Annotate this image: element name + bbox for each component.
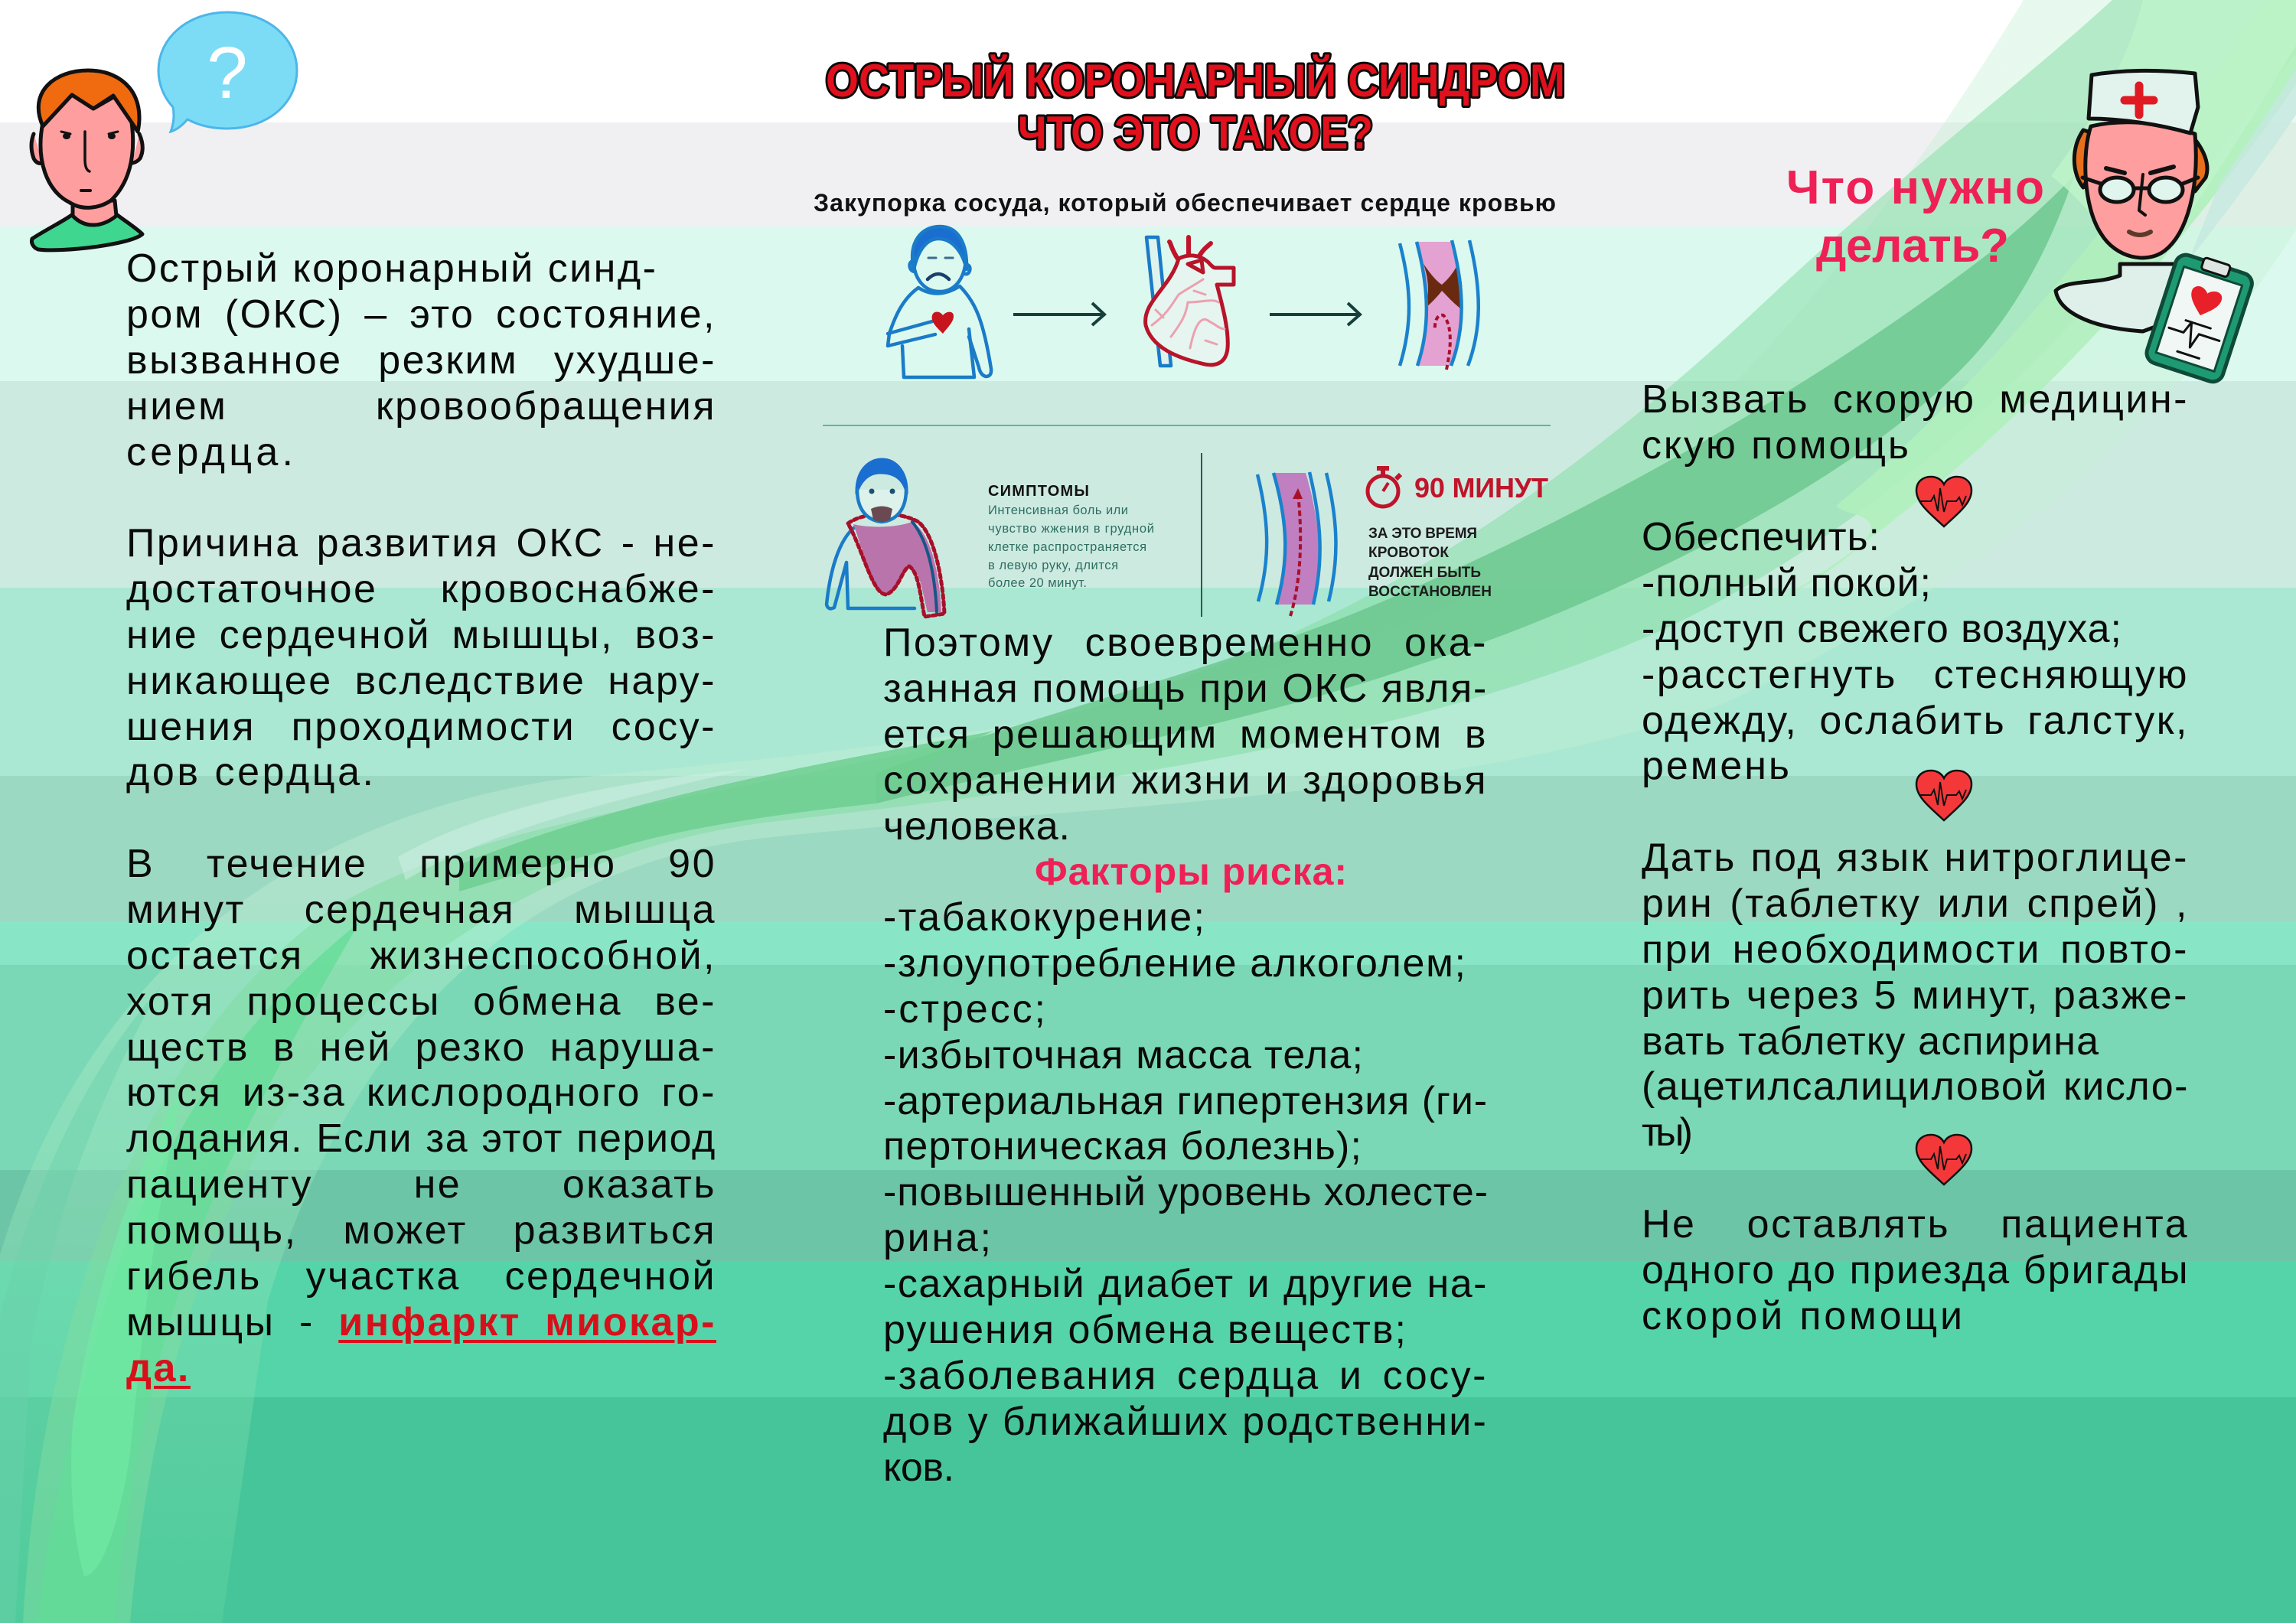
icon: small red heart: [932, 312, 954, 334]
icon: open artery: [1257, 472, 1336, 616]
text block: medication: рин (таблетку или спрей) ,: [1642, 882, 2189, 926]
icon: heart 3: [1916, 1135, 1971, 1185]
clipboard: [2144, 249, 2255, 384]
text block: 90 minutes explanation: остается жизнеспособной,: [126, 934, 716, 978]
doctor's coat: [2056, 264, 2175, 331]
title: ОСТРЫЙ КОРОНАРНЫЙ СИНДРОМ: [826, 55, 1565, 106]
text: 90 minutes: [1368, 472, 1548, 600]
text block: 90 minutes explanation: пациенту не оказать: [126, 1162, 716, 1207]
list: risk factors: -сахарный диабет и другие на-: [883, 1262, 1488, 1306]
text block: provide rest and air: Обеспечить:: [1642, 515, 1880, 559]
text block: 90 minutes explanation: [126, 842, 716, 1390]
divider line: [823, 425, 1551, 426]
list: risk factors: ков.: [883, 1445, 954, 1490]
text block: cause of ACS: [126, 521, 716, 794]
text: symptoms: [988, 483, 1154, 590]
text block: 90 minutes explanation: минут сердечная мышца: [126, 888, 716, 932]
text: 90 minutes: КРОВОТОК: [1368, 545, 1449, 561]
list: risk factors: -заболевания сердца и сосу-: [883, 1354, 1488, 1398]
text block: provide rest and air: -доступ свежего воздуха;: [1642, 607, 2122, 651]
list: risk factors: дов у ближайших родственни-: [883, 1400, 1488, 1444]
list: risk factors: -повышенный уровень холесте-: [883, 1170, 1489, 1214]
icon: man with pain area: [827, 459, 944, 617]
text block: 90 minutes explanation: да.: [126, 1346, 191, 1390]
text block: do not leave patient: скорой помощи: [1642, 1294, 1962, 1338]
list: risk factors: рушения обмена веществ;: [883, 1308, 1406, 1352]
text block: definition of ACS: сердца.: [126, 430, 293, 474]
doctor's hat: [2089, 70, 2198, 133]
text block: provide rest and air: -расстегнуть стесняющую: [1642, 653, 2189, 697]
list: risk factors: -злоупотребление алкоголем;: [883, 941, 1466, 986]
title: ЧТО ЭТО ТАКОЕ?: [1018, 107, 1373, 158]
text block: 90 minutes explanation: мышцы - инфаркт миокар-: [126, 1300, 716, 1344]
subtitle: blockage explanation: Закупорка сосуда, который обеспечивает сердце кровью: [814, 189, 1556, 217]
heading: what to do: делать?: [1816, 220, 2009, 272]
text block: do not leave patient: Не оставлять пациента: [1642, 1202, 2189, 1247]
doctor's face: [2074, 122, 2207, 258]
text: 90 minutes: ЗА ЭТО ВРЕМЯ: [1368, 526, 1477, 542]
text block: call ambulance: скую помощь: [1642, 423, 1909, 468]
text block: medication: вать таблетку аспирина: [1642, 1019, 2099, 1064]
text block: timely help: [883, 621, 1488, 849]
text block: 90 minutes explanation: ществ в ней резко наруша-: [126, 1025, 716, 1070]
text block: cause of ACS: ние сердечной мышцы, воз-: [126, 613, 716, 657]
text block: definition of ACS: ром (ОКС) – это состояние,: [126, 292, 716, 337]
text: 90 minutes: 90 МИНУТ: [1414, 472, 1548, 504]
icon: blocked artery: [1400, 240, 1479, 370]
arrow: [1270, 303, 1360, 325]
text block: do not leave patient: [1642, 1202, 2190, 1338]
man's head: [31, 70, 142, 250]
text block: cause of ACS: дов сердца.: [126, 750, 373, 794]
text block: 90 minutes explanation: гибель участка сердечной: [126, 1254, 716, 1299]
text block: call ambulance: [1642, 377, 2189, 468]
text block: 90 minutes explanation: ются из-за кислородного го-: [126, 1071, 716, 1115]
icon: anatomical heart: [1146, 237, 1234, 366]
text block: cause of ACS: Причина развития ОКС - не-: [126, 521, 716, 565]
icon: stopwatch: [1368, 468, 1401, 507]
text block: medication: при необходимости повто-: [1642, 927, 2189, 972]
text: symptoms: в левую руку, длится: [988, 559, 1118, 572]
text: symptoms: Интенсивная боль или: [988, 504, 1128, 517]
speech bubble: ?: [207, 32, 248, 114]
text block: do not leave patient: одного до приезда бригады: [1642, 1248, 2190, 1292]
text block: provide rest and air: -полный покой;: [1642, 561, 1931, 605]
heading: what to do: Что нужно: [1786, 161, 2044, 214]
text block: definition of ACS: Острый коронарный синд-: [126, 246, 656, 291]
text block: provide rest and air: одежду, ослабить галстук,: [1642, 699, 2189, 743]
text block: 90 minutes explanation: хотя процессы обмена ве-: [126, 979, 716, 1024]
text block: cause of ACS: шения проходимости сосу-: [126, 705, 716, 749]
text block: timely help: сохранении жизни и здоровья: [883, 758, 1488, 803]
text block: timely help: ется решающим моментом в: [883, 712, 1488, 757]
text block: timely help: Поэтому своевременно ока-: [883, 621, 1488, 665]
text block: 90 minutes explanation: лодания. Если за этот период: [126, 1116, 716, 1161]
text block: 90 minutes explanation: В течение примерно 90: [126, 842, 716, 886]
text block: cause of ACS: никающее вследствие нару-: [126, 659, 716, 703]
text block: medication: Дать под язык нитроглице-: [1642, 836, 2189, 880]
text block: call ambulance: Вызвать скорую медицин-: [1642, 377, 2189, 422]
speech bubble: [158, 12, 297, 132]
text: symptoms: СИМПТОМЫ: [988, 483, 1089, 500]
list: risk factors: [883, 895, 1489, 1490]
text block: medication: рить через 5 минут, разже-: [1642, 973, 2189, 1018]
text block: timely help: человека.: [883, 804, 1070, 849]
icon: man holding chest: [888, 227, 991, 377]
text block: medication: (ацетилсалициловой кисло-: [1642, 1064, 2189, 1109]
text: symptoms: клетке распространяется: [988, 540, 1146, 554]
list: risk factors: -артериальная гипертензия (ги-: [883, 1079, 1488, 1123]
heading: risk factors: Факторы риска:: [1035, 850, 1347, 893]
text block: 90 minutes explanation: помощь, может развиться: [126, 1208, 716, 1253]
text block: provide rest and air: ремень: [1642, 744, 1789, 788]
icon: heart 2: [1916, 771, 1971, 820]
arrow: [1013, 303, 1104, 325]
text: 90 minutes: ДОЛЖЕН БЫТЬ: [1368, 565, 1481, 581]
list: risk factors: рина;: [883, 1216, 991, 1260]
text block: definition of ACS: [126, 246, 716, 474]
text: symptoms: более 20 минут.: [988, 576, 1087, 590]
text: symptoms: чувство жжения в грудной: [988, 522, 1154, 536]
list: risk factors: -стресс;: [883, 987, 1045, 1031]
text block: medication: [1642, 836, 2189, 1155]
text block: provide rest and air: [1642, 515, 2189, 788]
icon: heart 1: [1916, 477, 1971, 526]
text block: definition of ACS: вызванное резким ухудше-: [126, 338, 716, 383]
text block: definition of ACS: нием кровообращения: [126, 384, 716, 429]
text block: medication: ты): [1642, 1110, 1693, 1155]
list: risk factors: -избыточная масса тела;: [883, 1033, 1363, 1077]
list: risk factors: пертоническая болезнь);: [883, 1124, 1362, 1168]
text block: cause of ACS: достаточное кровоснабже-: [126, 567, 716, 611]
list: risk factors: -табакокурение;: [883, 895, 1205, 940]
text: 90 minutes: ВОССТАНОВЛЕН: [1368, 584, 1492, 600]
text block: timely help: занная помощь при ОКС явля-: [883, 666, 1488, 711]
